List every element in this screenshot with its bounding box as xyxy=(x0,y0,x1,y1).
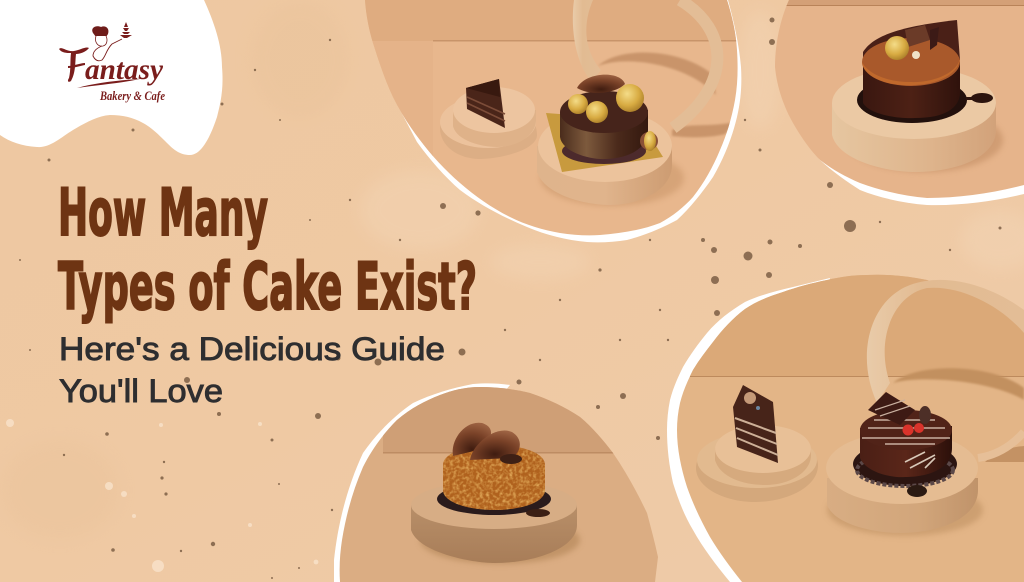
base shadow xyxy=(540,162,684,206)
left pedestal lower xyxy=(696,460,818,502)
panel: bottom centre cake scene xyxy=(334,380,665,582)
light specks xyxy=(6,419,318,572)
ring xyxy=(867,280,1024,403)
icon: layered cake slice xyxy=(733,385,778,463)
left pedestal lower xyxy=(440,126,537,159)
logo tagline: Bakery & Cafe xyxy=(99,89,165,103)
left pedestal upper xyxy=(715,448,811,485)
pedestal xyxy=(411,505,577,563)
panel border xyxy=(334,383,510,582)
icon: chocolate cake with gold balls xyxy=(560,75,658,164)
icon: cake slice xyxy=(466,79,505,128)
panel border xyxy=(398,0,741,242)
panel border xyxy=(667,278,830,582)
panel: bottom right cake scene xyxy=(665,270,1024,582)
panel: top right cake scene xyxy=(765,0,1024,205)
icon: chef mascot xyxy=(92,22,132,61)
ring back shadow xyxy=(893,368,1024,400)
board xyxy=(857,88,967,123)
scene xyxy=(665,270,1024,582)
big pedestal xyxy=(537,146,672,205)
ring shadow xyxy=(598,53,716,95)
scene xyxy=(360,0,745,245)
logo word: antasy xyxy=(85,53,164,86)
subtitle xyxy=(59,331,445,409)
logo letter F xyxy=(59,47,89,82)
subtitle: You'll Love xyxy=(59,373,223,409)
icon: caramel crumb cake xyxy=(443,423,545,510)
subtitle: Here's a Delicious Guide xyxy=(59,331,445,367)
big pedestal xyxy=(827,478,978,533)
title xyxy=(58,176,477,325)
left pedestal upper xyxy=(453,110,536,147)
board xyxy=(853,453,957,486)
scene xyxy=(765,0,1024,205)
board xyxy=(437,492,551,515)
icon: caramel glazed cake xyxy=(862,20,960,118)
title: How Many xyxy=(58,176,268,251)
logo swoosh xyxy=(77,79,140,88)
icon: chocolate cake with cherries xyxy=(860,392,952,477)
scene xyxy=(335,380,665,582)
pedestal xyxy=(832,103,996,172)
title: Types of Cake Exist? xyxy=(58,250,477,325)
panel border xyxy=(810,100,1024,205)
panel: logo blob xyxy=(0,0,223,155)
panel: top centre cake scene xyxy=(360,0,745,245)
ring xyxy=(572,0,600,74)
logo xyxy=(59,22,165,103)
gold paper xyxy=(546,113,663,172)
